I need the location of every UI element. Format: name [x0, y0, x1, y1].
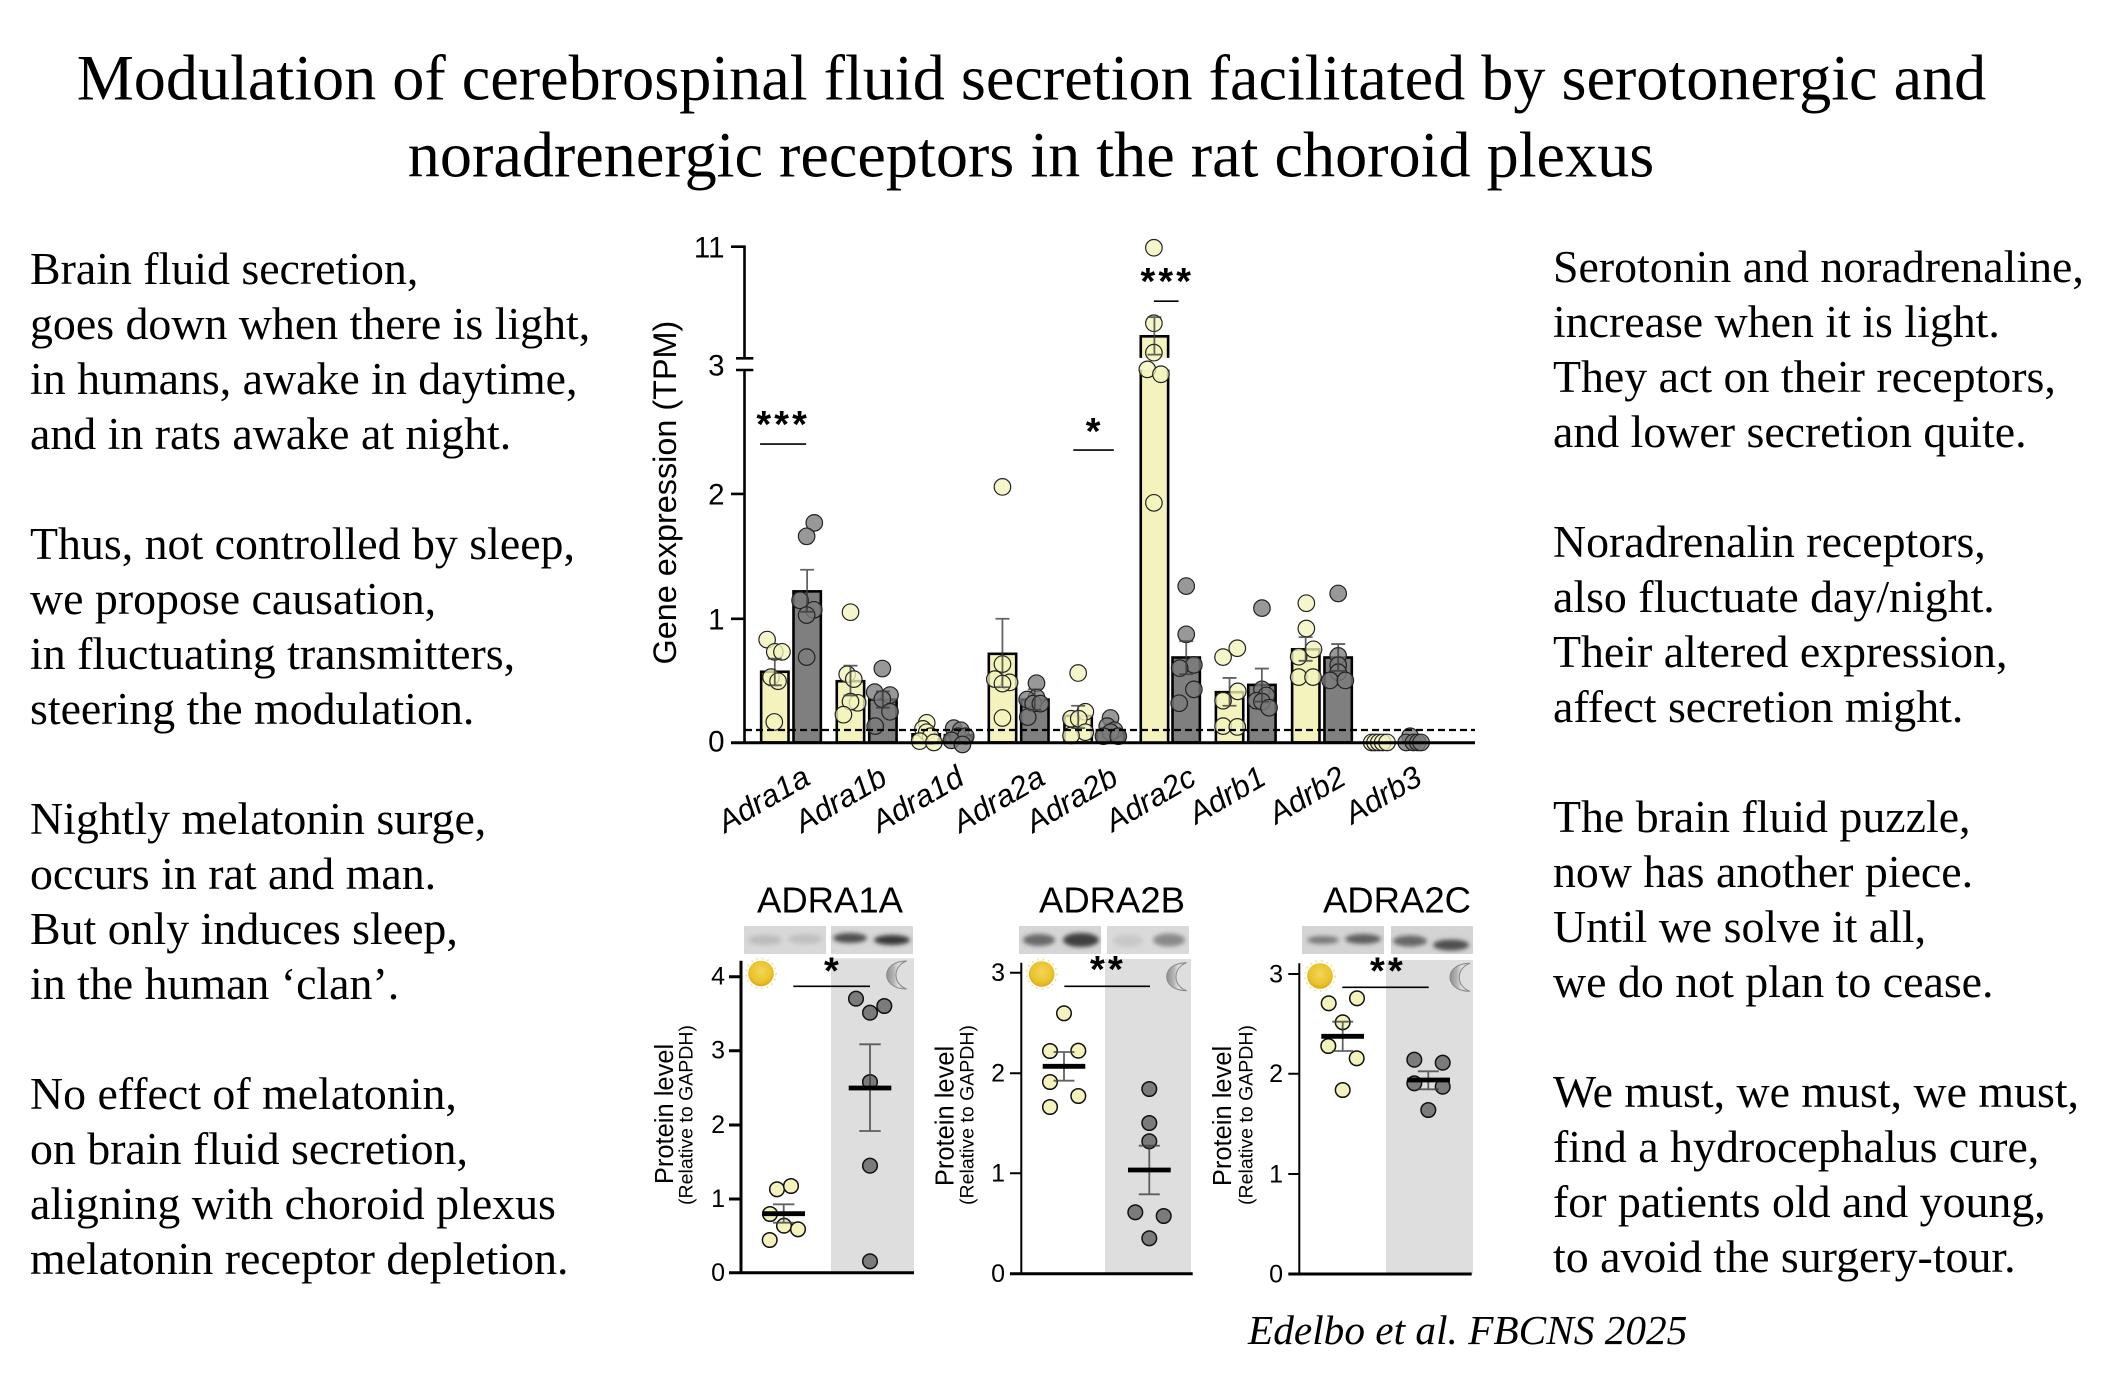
icon: sun — [1305, 961, 1335, 991]
title — [77, 42, 1986, 190]
axes — [1010, 963, 1021, 1274]
y axis tick labels: 11 — [694, 231, 724, 264]
y axis tick labels: 0 — [708, 726, 724, 759]
stanza: brain fluid secretion: and in rats awake at night. — [30, 408, 511, 459]
stanza: melatonin surge: Nightly melatonin surge, — [30, 793, 486, 844]
tick labels: 0 — [711, 1259, 725, 1287]
stanza: serotonin and noradrenaline: Serotonin and noradrenaline, — [1553, 241, 2084, 292]
tick labels: 2 — [711, 1111, 725, 1139]
stanza: hydrocephalus cure: for patients old and young, — [1553, 1176, 2046, 1227]
y axis title — [651, 1025, 698, 1205]
y axis title: Protein level — [1209, 1046, 1237, 1186]
data points: light — [1321, 991, 1364, 1097]
tick labels: 3 — [991, 959, 1005, 987]
stanza: no effect of melatonin: No effect of melatonin, — [30, 1068, 457, 1119]
y axis title: Protein level — [651, 1044, 679, 1184]
axes — [1288, 963, 1299, 1274]
stanza: sleep: steering the modulation. — [30, 683, 474, 734]
data points: dark — [849, 991, 892, 1269]
night shading — [1386, 960, 1473, 1274]
icon: moon — [887, 961, 907, 989]
stanza: sleep: Thus, not controlled by sleep, — [30, 518, 575, 569]
stanza: hydrocephalus cure: We must, we must, we must, — [1553, 1066, 2079, 1117]
tick labels: 1 — [1269, 1160, 1283, 1188]
stanza: melatonin surge: occurs in rat and man. — [30, 848, 436, 899]
stanza: brain fluid puzzle: Until we solve it all, — [1553, 901, 1926, 952]
panel: ADRA1A — [651, 880, 914, 1287]
stanza: no effect of melatonin: on brain fluid secretion, — [30, 1123, 468, 1174]
title: Modulation of cerebrospinal fluid secretion facilitated by serotonergic and — [77, 42, 1986, 114]
significance — [793, 950, 870, 992]
gene labels: Adra2b — [1018, 759, 1124, 840]
stanza: brain fluid secretion: Brain fluid secretion, — [30, 243, 418, 294]
western blot — [1019, 926, 1189, 954]
bar chart: gene expression — [647, 231, 1475, 840]
significance: ** — [1370, 950, 1406, 992]
title: noradrenergic receptors in the rat choroid plexus — [408, 120, 1654, 190]
gene labels: Adrb2 — [1261, 759, 1352, 832]
bars: dark phase — [793, 591, 1352, 742]
tick labels — [991, 959, 1005, 1288]
heading: ADRA2C — [1323, 880, 1471, 921]
western blot — [744, 926, 913, 954]
stanza: brain fluid secretion: goes down when there is light, — [30, 298, 590, 349]
stanza: noradrenalin receptors: also fluctuate day/night. — [1553, 571, 1995, 622]
y axis title: Protein level — [931, 1046, 959, 1186]
citation: Edelbo et al. FBCNS 2025 — [1247, 1307, 1687, 1353]
stanza: melatonin surge: in the human ‘clan’. — [30, 958, 399, 1009]
y axis tick labels: 1 — [708, 603, 724, 636]
stanza: noradrenalin receptors: Their altered expression, — [1553, 626, 2007, 677]
significance markers — [756, 261, 1194, 453]
y axis tick labels: 3 — [708, 350, 724, 383]
stanza: brain fluid puzzle: now has another piece. — [1553, 846, 1973, 897]
y axis title: (Relative to GAPDH) — [1236, 1025, 1258, 1205]
stanza: sleep: in fluctuating transmitters, — [30, 628, 515, 679]
heading: ADRA2B — [1039, 880, 1185, 921]
threshold dashed line — [745, 729, 1475, 731]
tick labels: 1 — [991, 1160, 1005, 1188]
significance — [1342, 950, 1429, 992]
tick labels — [1269, 960, 1283, 1288]
tick labels: 0 — [1269, 1260, 1283, 1288]
tick labels: 3 — [1269, 960, 1283, 988]
tick labels: 2 — [991, 1060, 1005, 1088]
gene labels: Adra1d — [864, 758, 971, 840]
mean and error bars — [762, 1044, 891, 1223]
stanza: sleep: we propose causation, — [30, 573, 436, 624]
tick labels: 0 — [991, 1260, 1005, 1288]
stanza: brain fluid puzzle: we do not plan to cease. — [1553, 956, 1993, 1007]
right text column — [1553, 241, 2084, 1282]
panel: ADRA2B — [931, 880, 1193, 1288]
data points: light phase — [759, 240, 1395, 751]
stanza: serotonin and noradrenaline: increase when it is light. — [1553, 296, 2000, 347]
error bars — [768, 317, 1345, 728]
tick labels: 2 — [1269, 1060, 1283, 1088]
stanza: melatonin surge: But only induces sleep, — [30, 903, 458, 954]
y axis title: Gene expression (TPM) — [647, 321, 683, 665]
data points: light — [762, 1179, 805, 1247]
tick labels — [711, 962, 725, 1287]
panel: ADRA2C — [1209, 880, 1473, 1288]
data points: dark — [1407, 1052, 1450, 1117]
icon: sun — [1027, 959, 1057, 989]
stanza: serotonin and noradrenaline: and lower secretion quite. — [1553, 406, 2027, 457]
stanza: brain fluid puzzle: The brain fluid puzzle, — [1553, 791, 1971, 842]
western blot — [1302, 926, 1473, 954]
significance markers: * — [1086, 411, 1104, 453]
significance: ** — [1090, 949, 1126, 991]
y axis title — [931, 1025, 978, 1205]
tick labels: 3 — [711, 1037, 725, 1065]
data points: dark phase — [792, 515, 1429, 753]
axes — [729, 961, 914, 1273]
bars: light phase — [761, 336, 1319, 742]
significance markers: *** — [1140, 261, 1194, 303]
y axis tick labels — [694, 231, 724, 759]
data points: dark — [1128, 1082, 1171, 1246]
data points: light — [1043, 1006, 1086, 1114]
stanza: no effect of melatonin: melatonin receptor depletion. — [30, 1233, 568, 1284]
stanza: noradrenalin receptors: affect secretion might. — [1553, 681, 1963, 732]
gene labels: Adrb1 — [1181, 759, 1272, 832]
tick labels: 4 — [711, 962, 725, 990]
gene labels — [710, 758, 1428, 840]
significance — [1064, 949, 1150, 991]
axes — [731, 247, 753, 743]
y axis title — [1209, 1025, 1258, 1205]
night shading — [831, 958, 914, 1273]
stanza: serotonin and noradrenaline: They act on their receptors, — [1553, 351, 2056, 402]
gene labels: Adra1b — [787, 759, 892, 840]
heading: ADRA1A — [757, 880, 904, 921]
stanza: hydrocephalus cure: to avoid the surgery-tour. — [1553, 1231, 2016, 1282]
left text column — [30, 243, 590, 1284]
y axis title: (Relative to GAPDH) — [956, 1025, 978, 1205]
night shading — [1105, 959, 1191, 1274]
gene labels: Adra2c — [1097, 759, 1202, 839]
mean and error bars — [1043, 1052, 1171, 1194]
gene labels: Adra1a — [710, 759, 816, 840]
stanza: no effect of melatonin: aligning with choroid plexus — [30, 1178, 556, 1229]
icon: moon — [1167, 963, 1187, 991]
stanza: hydrocephalus cure: find a hydrocephalus cure, — [1553, 1121, 2039, 1172]
significance markers: *** — [756, 404, 810, 446]
mean and error bars — [1321, 1022, 1450, 1089]
icon: sun — [746, 958, 776, 988]
stanza: noradrenalin receptors: Noradrenalin receptors, — [1553, 516, 1986, 567]
icon: moon — [1450, 963, 1470, 991]
stanza: brain fluid secretion: in humans, awake in daytime, — [30, 353, 577, 404]
gene labels: Adrb3 — [1337, 759, 1428, 832]
y axis title: (Relative to GAPDH) — [676, 1025, 698, 1205]
gene labels: Adra2a — [945, 759, 1050, 840]
plotted data — [756, 240, 1429, 753]
tick labels: 1 — [711, 1185, 725, 1213]
y axis tick labels: 2 — [708, 478, 724, 511]
significance: * — [824, 950, 842, 992]
